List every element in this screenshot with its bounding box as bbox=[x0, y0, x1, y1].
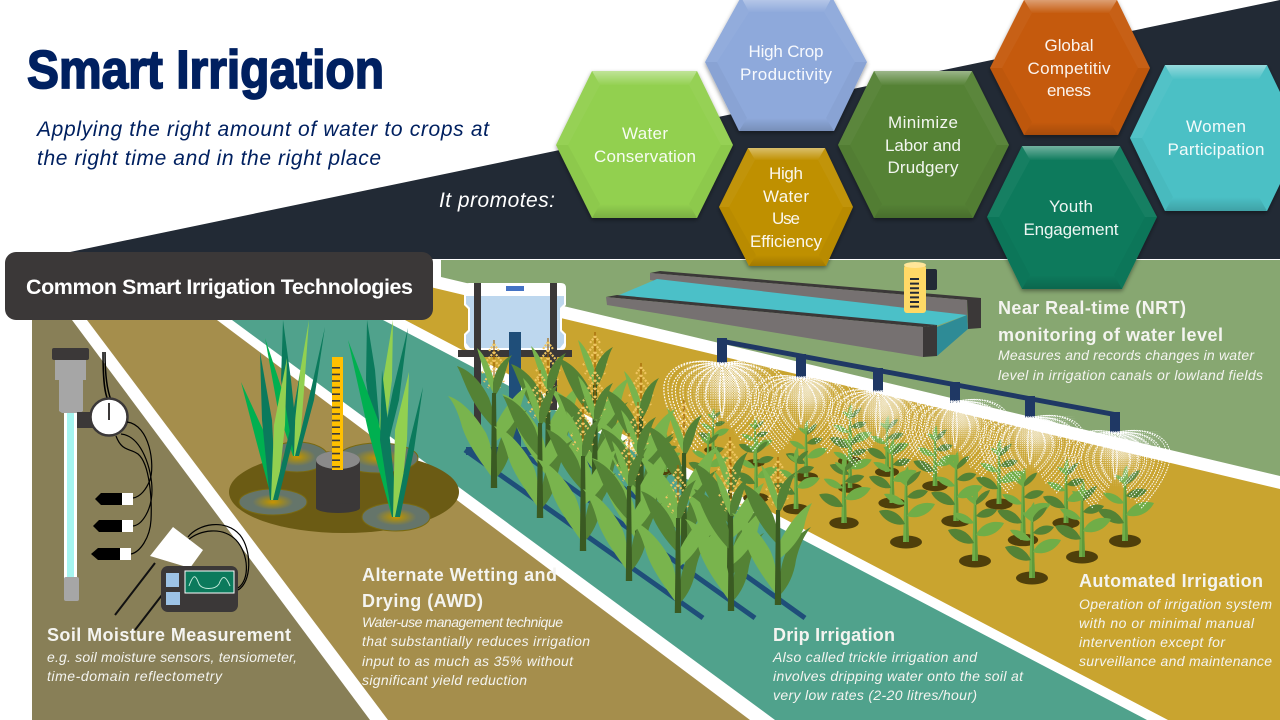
hexagon: minimize labor and drudgery bbox=[838, 71, 1009, 218]
heading panel: common smart irrigation technologies bbox=[5, 252, 433, 320]
panel: yellow automated irrigation field bbox=[405, 281, 1280, 720]
text block: soil moisture measurement bbox=[47, 625, 297, 684]
text block: automated irrigation: surveillance and maintenance bbox=[1079, 653, 1272, 669]
hexagon: high crop productivity bbox=[705, 0, 867, 131]
text block: alternate wetting and drying: Drying (AWD) bbox=[362, 591, 483, 611]
title: Smart Irrigation bbox=[27, 40, 384, 100]
hexagon: women participation: Women bbox=[1186, 117, 1246, 136]
text block: alternate wetting and drying bbox=[362, 565, 590, 688]
hexagon: high water use efficiency: High bbox=[769, 164, 803, 183]
text block: drip irrigation: Also called trickle irrigation and bbox=[772, 649, 978, 665]
hexagon: women participation: Participation bbox=[1168, 140, 1264, 159]
hexagon: youth engagement: Engagement bbox=[1024, 220, 1119, 239]
hexagon: high water use efficiency: Water bbox=[763, 187, 809, 206]
text block: soil moisture measurement: Soil Moisture Measurement bbox=[47, 625, 291, 645]
hexagon: minimize labor and drudgery: Minimize bbox=[888, 113, 958, 132]
label: it promotes: It promotes: bbox=[439, 189, 555, 212]
hexagon: youth engagement: Youth bbox=[1049, 197, 1093, 216]
text block: soil moisture measurement: time-domain reflectometry bbox=[47, 668, 223, 684]
icon: canal water level sensor bbox=[904, 262, 937, 313]
text block: automated irrigation: Automated Irrigation bbox=[1079, 571, 1263, 591]
hexagon: youth engagement bbox=[987, 146, 1157, 289]
hexagon: water conservation bbox=[556, 71, 733, 218]
hexagon: minimize labor and drudgery: Labor and bbox=[885, 136, 961, 155]
hexagon: global competitiveness: Global bbox=[1044, 36, 1094, 55]
text block: automated irrigation: Operation of irrigation system bbox=[1079, 596, 1272, 612]
subtitle: the right time and in the right place bbox=[37, 147, 381, 170]
hexagon: high water use efficiency: Efficiency bbox=[750, 232, 822, 251]
icon: AWD rice field bbox=[229, 320, 459, 533]
text block: drip irrigation bbox=[772, 625, 1024, 703]
text block: near real-time monitoring bbox=[998, 298, 1263, 383]
icon: corn plants back row bbox=[502, 332, 764, 585]
hexagon: high water use efficiency: Use bbox=[772, 209, 800, 228]
hexagon: high water use efficiency bbox=[719, 148, 853, 266]
text block: near real-time monitoring: level in irrigation canals or lowland fields bbox=[998, 367, 1263, 383]
text block: drip irrigation: involves dripping water onto the soil at bbox=[773, 668, 1024, 684]
panel: brown AWD field bbox=[87, 320, 750, 720]
subtitle: Applying the right amount of water to crops at bbox=[35, 118, 490, 141]
panel: dark benefits band bbox=[70, 0, 1280, 259]
icon: soil moisture probes bbox=[91, 422, 152, 560]
hexagon: women participation bbox=[1130, 65, 1280, 211]
text block: near real-time monitoring: monitoring of water level bbox=[998, 325, 1223, 345]
icon: sprinkler spray bbox=[662, 361, 1175, 509]
icon: tensiometer bbox=[52, 348, 128, 601]
text block: drip irrigation: Drip Irrigation bbox=[773, 625, 895, 645]
text block: alternate wetting and drying: significant yield reduction bbox=[362, 672, 527, 688]
heading panel: common smart irrigation technologies: Common Smart Irrigation Technologies bbox=[26, 275, 413, 299]
hexagon: high crop productivity: Productivity bbox=[740, 65, 832, 84]
hexagon: minimize labor and drudgery: Drudgery bbox=[888, 158, 959, 177]
icon: concrete canal with water bbox=[606, 271, 981, 357]
seedlings: automated irrigation crops bbox=[652, 404, 1154, 584]
text block: automated irrigation: intervention except for bbox=[1079, 634, 1226, 650]
text block: soil moisture measurement: e.g. soil moisture sensors, tensiometer, bbox=[47, 649, 297, 665]
hexagon: global competitiveness bbox=[990, 0, 1150, 135]
text block: near real-time monitoring: Near Real-time (NRT) bbox=[998, 298, 1186, 318]
icon: time-domain reflectometry meter bbox=[115, 525, 249, 630]
icon: sprinkler pipe bbox=[717, 338, 1120, 433]
text block: alternate wetting and drying: Water-use management technique bbox=[362, 614, 563, 630]
panel: olive soil moisture field bbox=[32, 320, 370, 720]
hexagon: high crop productivity: High Crop bbox=[748, 42, 824, 61]
text block: alternate wetting and drying: Alternate Wetting and bbox=[362, 565, 557, 585]
hexagon: global competitiveness: Competitiv bbox=[1028, 59, 1111, 78]
text block: alternate wetting and drying: that substantially reduces irrigation bbox=[362, 633, 590, 649]
text block: automated irrigation bbox=[1079, 571, 1272, 669]
hexagon: water conservation: Water bbox=[622, 124, 668, 143]
text block: near real-time monitoring: Measures and records changes in water bbox=[998, 347, 1255, 363]
text block: alternate wetting and drying: input to as much as 35% without bbox=[362, 653, 574, 669]
text block: drip irrigation: very low rates (2-20 litres/hour) bbox=[773, 687, 977, 703]
hexagon: water conservation: Conservation bbox=[594, 147, 696, 166]
panel: teal drip irrigation field bbox=[232, 320, 1147, 720]
panel: green field background bbox=[441, 260, 1280, 476]
icon: drip lines bbox=[465, 450, 805, 618]
icon: corn plants front row bbox=[448, 340, 812, 613]
icon: AWD perforated tube with ruler bbox=[316, 357, 360, 513]
text block: automated irrigation: with no or minimal manual bbox=[1079, 615, 1255, 631]
hexagon: global competitiveness: eness bbox=[1047, 81, 1091, 100]
icon: water storage tank on stand bbox=[458, 283, 572, 447]
subtitle bbox=[35, 118, 490, 170]
